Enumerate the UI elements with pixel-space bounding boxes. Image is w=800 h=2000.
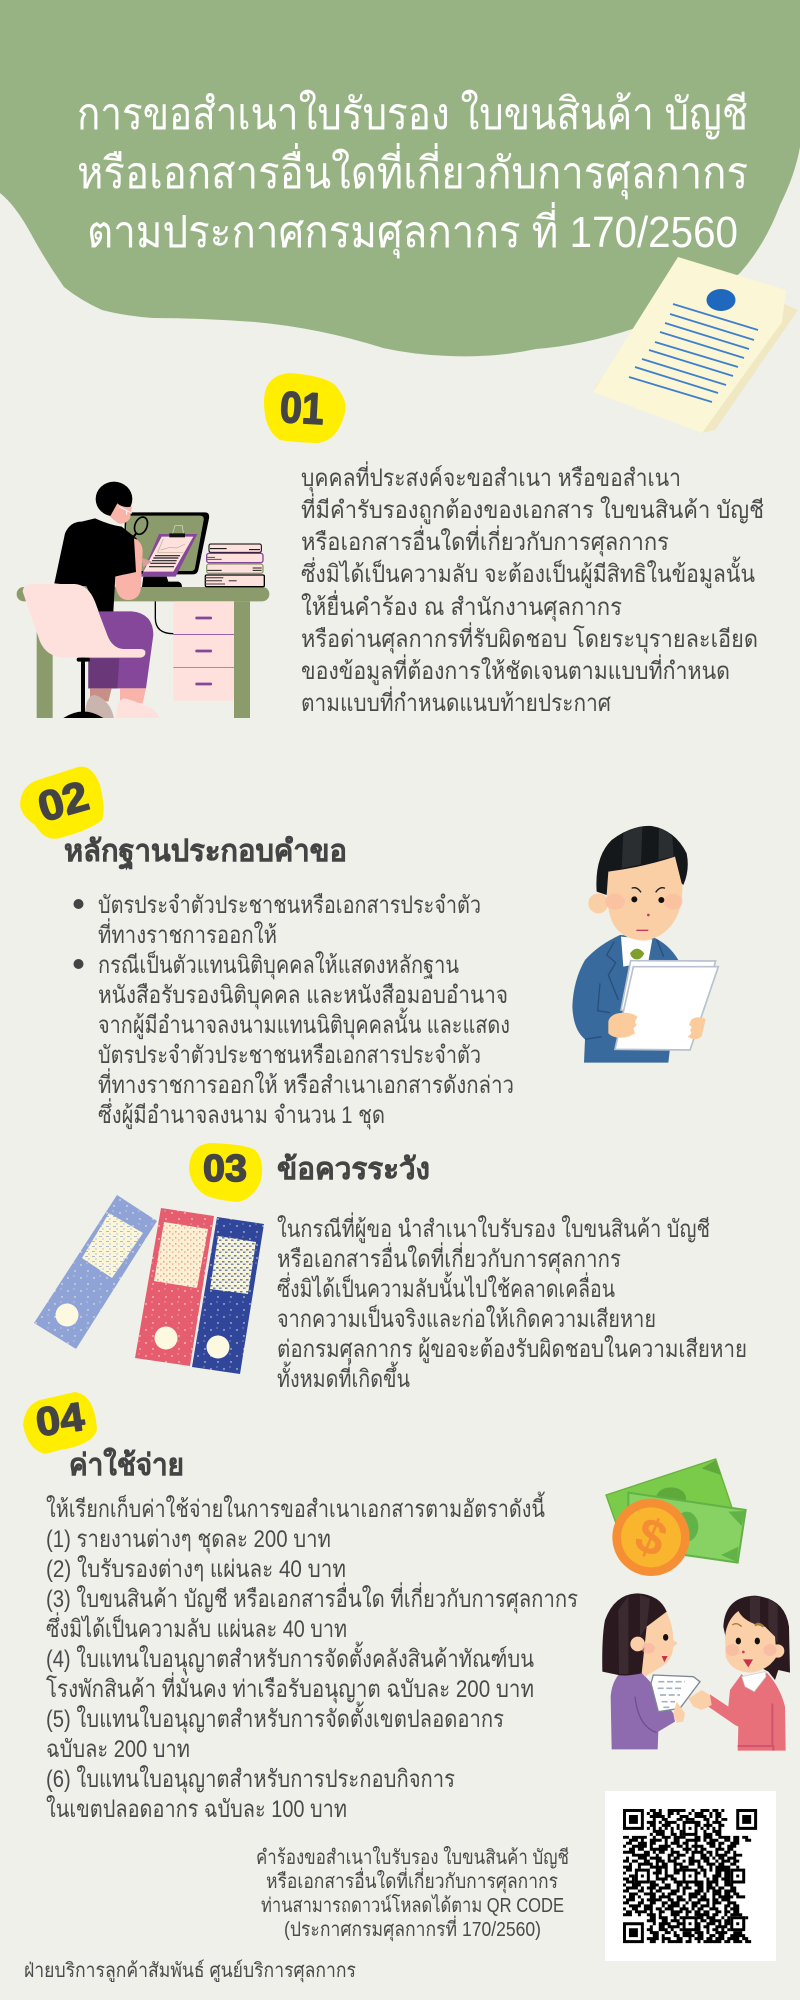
text block: step 01: หรือด่านศุลกากรที่รับผิดชอบ โดยระบุรายละเอียด	[301, 622, 758, 654]
text block: step 03: ซึ่งมิได้เป็นความลับนั้นไปใช้คลาดเคลื่อน	[277, 1271, 615, 1303]
illustration: binders	[34, 1195, 264, 1374]
illustration: two women exchanging a document	[602, 1593, 790, 1751]
icon: money and coin: $	[628, 1506, 675, 1568]
bullet list: step 02: หนังสือรับรองนิติบุคคล และหนังสือมอบอำนาจ	[98, 982, 508, 1010]
text block: fees list: ในเขตปลอดอากร ฉบับละ 100 บาท	[46, 1795, 347, 1823]
footer: ฝ่ายบริการลูกค้าสัมพันธ์ ศูนย์บริการศุลกากร	[24, 1959, 356, 1983]
icon: money and coin	[606, 1459, 746, 1576]
heading: step 04: ค่าใช้จ่าย	[69, 1447, 184, 1482]
bullet list: step 02	[74, 892, 514, 1130]
text block: fees list: (2) ใบรับรองต่างๆ แผ่นละ 40 บาท	[46, 1555, 346, 1583]
note: where to download the form: (ประกาศกรมศุลกากรที่ 170/2560)	[284, 1915, 541, 1942]
note: where to download the form	[256, 1846, 569, 1942]
badge 04	[23, 1392, 97, 1454]
text block: step 01: ตามแบบที่กำหนดแนบท้ายประกาศ	[301, 686, 611, 717]
heading: step 03: ข้อควรระวัง	[277, 1153, 430, 1186]
text block: fees list: (4) ใบแทนใบอนุญาตสำหรับการจัดตั้งคลังสินค้าทัณฑ์บน	[46, 1641, 534, 1674]
text block: fees list	[46, 1491, 578, 1823]
text block: step 01: หรือเอกสารอื่นใดที่เกี่ยวกับการศุลกากร	[301, 525, 669, 557]
header green blob	[0, 0, 800, 356]
note: where to download the form: คำร้องขอสำเนาใบรับรอง ใบขนสินค้า บัญชี	[256, 1846, 569, 1869]
text block: fees list: ให้เรียกเก็บค่าใช้จ่ายในการขอสำเนาเอกสารตามอัตราดังนี้	[46, 1491, 545, 1523]
text block: step 01: ให้ยื่นคำร้อง ณ สำนักงานศุลกากร	[301, 590, 622, 622]
bullet list: step 02: ที่ทางราชการออกให้	[98, 918, 277, 949]
badge 04: 04	[33, 1395, 88, 1445]
illustration: businessman with papers	[572, 826, 718, 1063]
text block: step 03	[277, 1212, 747, 1393]
text block: step 01: บุคคลที่ประสงค์จะขอสำเนา หรือขอสำเนา	[301, 461, 681, 493]
badge 03	[189, 1143, 262, 1202]
heading: step 02: หลักฐานประกอบคำขอ	[64, 835, 347, 871]
badge 01	[264, 373, 346, 443]
text block: step 03: หรือเอกสารอื่นใดที่เกี่ยวกับการศุลกากร	[277, 1242, 621, 1274]
text block: step 03: ในกรณีที่ผู้ขอ นำสำเนาใบรับรอง ใบขนสินค้า บัญชี	[277, 1212, 710, 1244]
title: หรือเอกสารอื่นใดที่เกี่ยวกับการศุลกากร	[77, 142, 748, 200]
bullet list: step 02: กรณีเป็นตัวแทนนิติบุคคลให้แสดงหลักฐาน	[98, 950, 459, 980]
bullet list: step 02: จากผู้มีอำนาจลงนามแทนนิติบุคคลนั้น และแสดง	[98, 1007, 510, 1040]
text block: fees list: (5) ใบแทนใบอนุญาตสำหรับการจัดตั้งเขตปลอดอากร	[46, 1701, 504, 1734]
text block: step 01: ซึ่งมิได้เป็นความลับ จะต้องเป็นผู้มีสิทธิในข้อมูลนั้น	[301, 556, 755, 589]
text block: fees list: ฉบับละ 200 บาท	[46, 1736, 190, 1763]
note: where to download the form: หรือเอกสารอื่นใดที่เกี่ยวกับการศุลกากร	[266, 1867, 558, 1894]
bullet list: step 02: ซึ่งผู้มีอำนาจลงนาม จำนวน 1 ชุด	[98, 1098, 385, 1130]
badge 01: 01	[279, 383, 325, 434]
badge 02	[20, 767, 104, 839]
text block: step 01: ของข้อมูลที่ต้องการให้ชัดเจนตามแบบที่กำหนด	[301, 654, 730, 686]
illustration: person at desk	[17, 482, 269, 718]
text block: fees list: โรงพักสินค้า ที่มั่นคง ท่าเรือรับอนุญาต ฉบับละ 200 บาท	[46, 1672, 534, 1704]
title	[77, 89, 748, 259]
note: where to download the form: ท่านสามารถดาวน์โหลดได้ตาม QR CODE	[261, 1894, 564, 1917]
icon: document pages	[593, 257, 798, 433]
bullet list: step 02: บัตรประจำตัวประชาชนหรือเอกสารประจำตัว	[98, 1042, 481, 1069]
text block: step 03: จากความเป็นจริงและก่อให้เกิดความเสียหาย	[277, 1304, 656, 1333]
text block: fees list: (1) รายงานต่างๆ ชุดละ 200 บาท	[46, 1526, 331, 1554]
badge 03: 03	[203, 1148, 247, 1190]
bullet list: step 02: บัตรประจำตัวประชาชนหรือเอกสารประจำตัว	[98, 892, 481, 919]
text block: step 03: ทั้งหมดที่เกิดขึ้น	[277, 1361, 410, 1393]
title: ตามประกาศกรมศุลกากร ที่ 170/2560	[87, 201, 738, 259]
text block: fees list: (6) ใบแทนใบอนุญาตสำหรับการประกอบกิจการ	[46, 1765, 455, 1794]
QR code	[605, 1791, 776, 1961]
text block: fees list: (3) ใบขนสินค้า บัญชี หรือเอกสารอื่นใด ที่เกี่ยวกับการศุลกากร	[46, 1582, 578, 1614]
text block: step 01: ที่มีคำรับรองถูกต้องของเอกสาร ใบขนสินค้า บัญชี	[301, 493, 764, 525]
text block: step 01	[301, 461, 764, 717]
badge 02: 02	[33, 772, 94, 831]
text block: fees list: ซึ่งมิได้เป็นความลับ แผ่นละ 40 บาท	[46, 1612, 347, 1643]
bullet list: step 02: ที่ทางราชการออกให้ หรือสำเนาเอกสารดังกล่าว	[98, 1068, 514, 1099]
